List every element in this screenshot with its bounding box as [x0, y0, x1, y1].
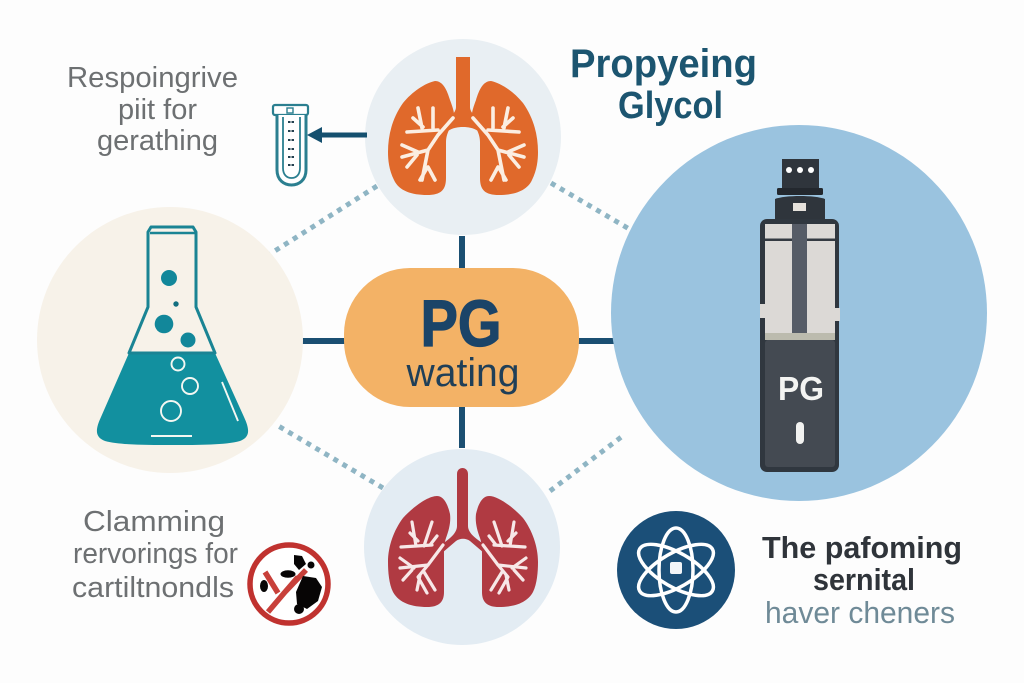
text block: bottom left [72, 506, 238, 604]
panel: flask [37, 207, 303, 473]
text block: bottom right: haver cheners [765, 595, 955, 630]
text block: bottom right: sernital [813, 562, 915, 597]
title [570, 42, 757, 127]
panel: central PG pill: PG [420, 286, 502, 360]
panel: vape device [611, 125, 987, 501]
title: Propyeing [570, 42, 757, 86]
panel: bottom lungs [364, 449, 560, 645]
panel: vape device: PG [778, 370, 824, 407]
text block: bottom right [762, 530, 962, 630]
text block: top left [67, 62, 238, 157]
panel: central PG pill: wating [406, 351, 520, 395]
title: Glycol [618, 85, 723, 127]
connector lines [301, 236, 616, 448]
text block: bottom left: rervorings for [73, 538, 238, 570]
text block: top left: piit for [118, 94, 197, 126]
text block: top left: gerathing [97, 125, 218, 157]
panel: top lungs [365, 39, 561, 235]
icon: test tube with arrow [273, 105, 367, 185]
text block: bottom left: cartiltnondls [72, 572, 234, 604]
panel: central PG pill [344, 268, 579, 407]
text block: top left: Respoingrive [67, 62, 238, 94]
text block: bottom right: The pafoming [762, 530, 962, 565]
text block: bottom left: Clamming [83, 506, 225, 538]
icon: atom [617, 511, 735, 629]
icon: prohibition sign [250, 545, 328, 623]
